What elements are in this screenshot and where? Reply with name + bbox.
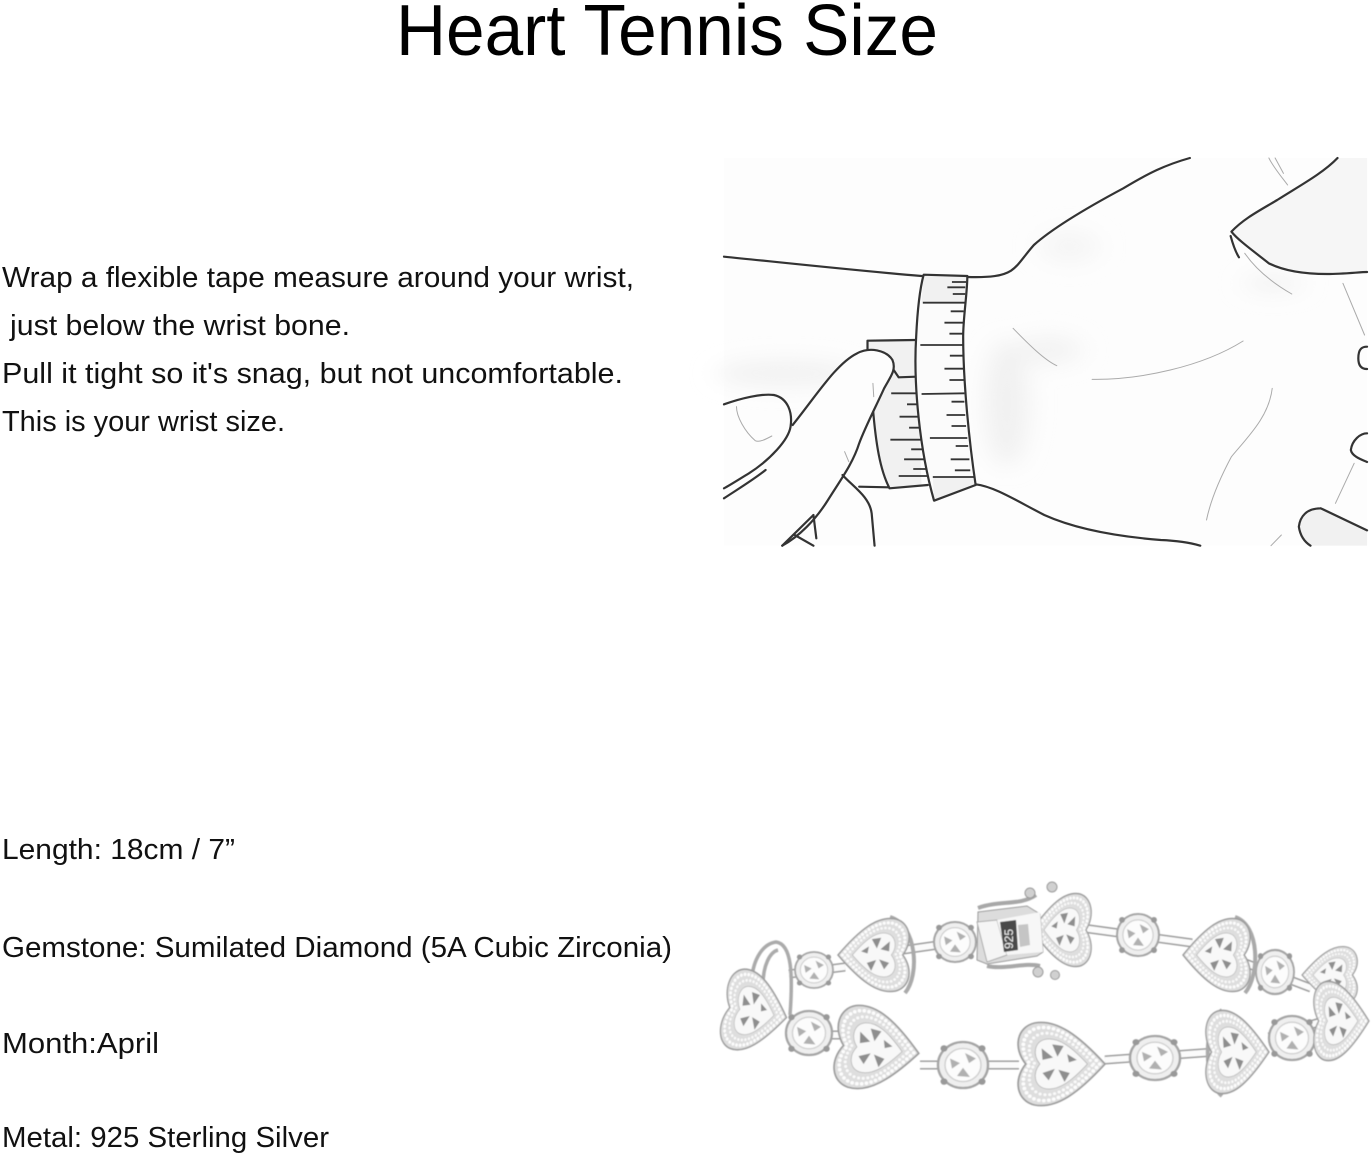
text block: measuring instructions bbox=[2, 262, 634, 438]
text block: measuring instructions: just below the wrist bone. bbox=[9, 310, 350, 342]
text block: product specifications: Gemstone: Sumilated Diamond (5A Cubic Zirconia) bbox=[2, 932, 672, 964]
clasp heart bbox=[1032, 893, 1091, 967]
illustration: tape measure around wrist bbox=[716, 158, 1367, 546]
upper finger outline bbox=[1231, 158, 1367, 274]
bracelet connecting bars bbox=[789, 928, 1327, 1065]
photo: heart tennis bracelet bbox=[717, 882, 1369, 1106]
box clasp: 925 bbox=[1002, 929, 1016, 949]
back tape strip bbox=[859, 340, 928, 488]
lower hand and wrist outline bbox=[782, 475, 1200, 546]
text block: product specifications: Length: 18cm / 7” bbox=[2, 834, 235, 866]
forearm and hand upper outline bbox=[724, 158, 1190, 277]
pinching finger and thumb bbox=[724, 350, 894, 546]
text block: product specifications: Month:April bbox=[2, 1028, 159, 1060]
text block: measuring instructions: This is your wrist size. bbox=[2, 406, 285, 438]
text block: product specifications: Metal: 925 Sterling Silver bbox=[2, 1122, 329, 1154]
top-right finger shade bbox=[1231, 158, 1367, 274]
box clasp bbox=[977, 882, 1060, 980]
front tape measure bbox=[915, 275, 976, 501]
far-left back metal frame bbox=[752, 942, 791, 1015]
front hearts bbox=[717, 967, 1369, 1106]
text block: product specifications bbox=[2, 834, 672, 1154]
text block: measuring instructions: Pull it tight so it's snag, but not uncomfortable. bbox=[2, 358, 623, 390]
text block: measuring instructions: Wrap a flexible tape measure around your wrist, bbox=[2, 262, 634, 294]
round stones bbox=[786, 914, 1315, 1088]
lower right finger bbox=[1299, 508, 1367, 546]
back hearts bbox=[838, 917, 1357, 1003]
palm crease lines bbox=[1013, 158, 1365, 546]
